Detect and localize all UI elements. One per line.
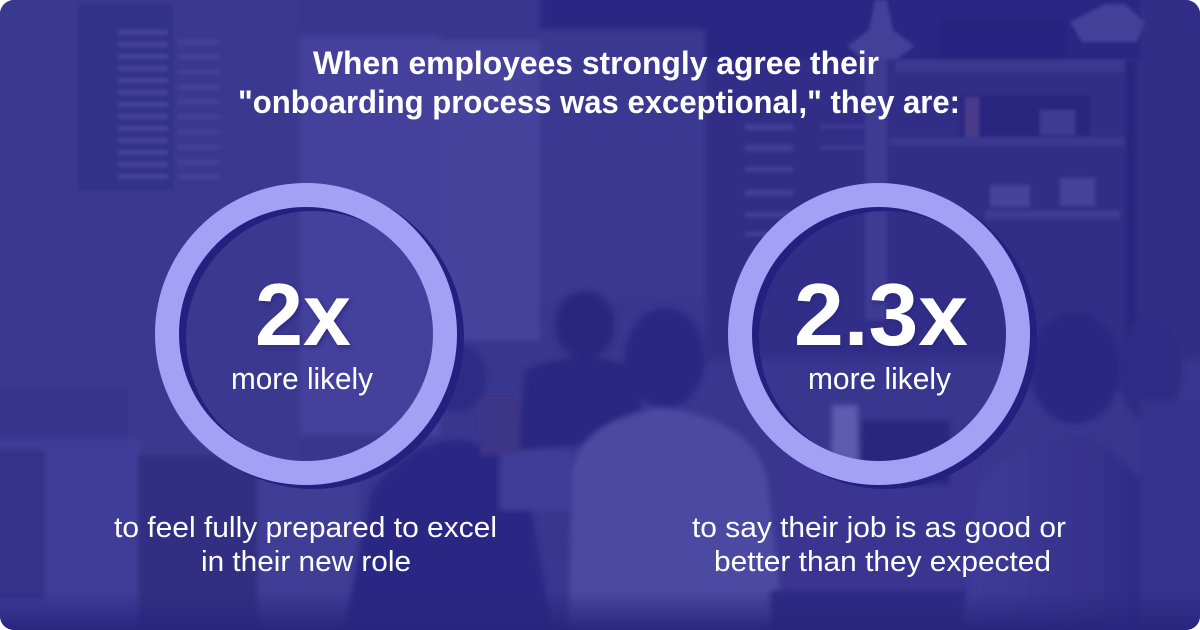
seated person left, dark jacket xyxy=(348,440,547,618)
heading: "onboarding process was exceptional," they are: xyxy=(238,84,960,120)
man at right xyxy=(1029,312,1121,424)
woman at back xyxy=(555,291,615,359)
window blinds, left xyxy=(78,5,220,190)
stat value 2.3x: 2.3x xyxy=(794,265,968,364)
caption right: to say their job is as good or xyxy=(692,512,1066,544)
caption left: in their new role xyxy=(201,546,411,578)
caption left: to feel fully prepared to excel xyxy=(114,512,497,544)
caption left xyxy=(114,512,497,578)
people around the table xyxy=(340,291,1200,630)
heading: When employees strongly agree their xyxy=(313,45,879,81)
label: more likely: more likely xyxy=(231,361,373,396)
stat value 2x: 2x xyxy=(255,265,351,364)
caption right xyxy=(692,512,1066,578)
stat circle: 2x xyxy=(167,195,452,477)
heading xyxy=(238,45,960,120)
caption right: better than they expected xyxy=(714,546,1051,578)
label: more likely: more likely xyxy=(808,361,951,396)
stat circle: 2.3x xyxy=(740,195,1025,477)
far-right person xyxy=(1120,360,1181,415)
shelves and lamps, right xyxy=(744,0,1144,319)
vignette at bottom xyxy=(0,600,1200,630)
head and white shirt, centre xyxy=(625,308,705,408)
centre table xyxy=(785,440,975,630)
